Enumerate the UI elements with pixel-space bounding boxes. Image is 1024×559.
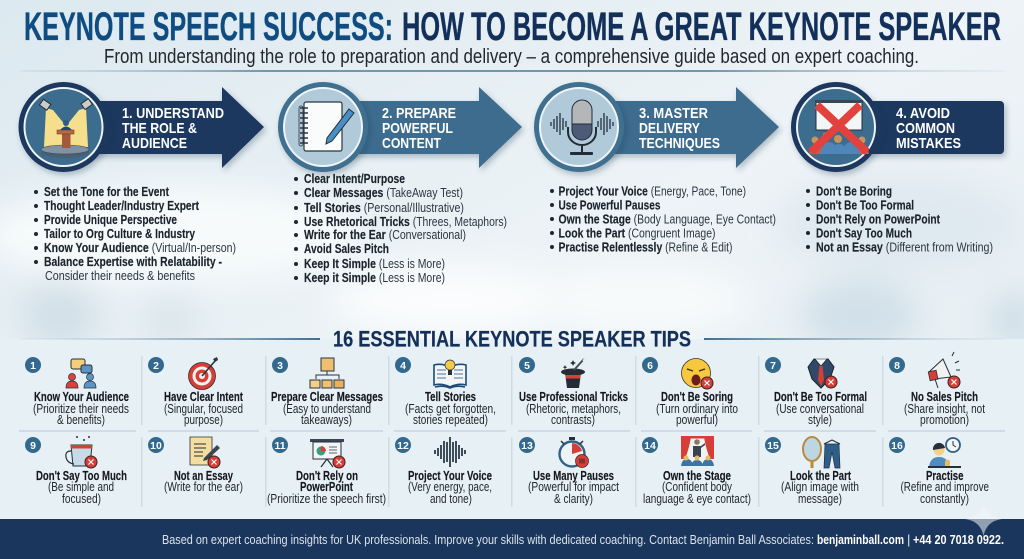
tip 11: 11 (274, 440, 286, 452)
list: understand the role (34, 184, 236, 283)
icon: overflowing cup (66, 437, 97, 468)
list: understand the role: Balance Expertise with Relatability - (44, 254, 222, 269)
icon: message boxes (310, 358, 344, 388)
list: common mistakes: Not an Essay (Different from Writing) (816, 240, 993, 254)
footer (0, 519, 1024, 559)
tip 11: (Prioritize the speech first) (267, 492, 386, 506)
step 2 circle (278, 82, 368, 172)
step 2 label (382, 105, 456, 152)
step 3 label: 3. MASTER (639, 105, 708, 122)
tip 10: 10 (150, 440, 162, 452)
icon: magic hat (561, 359, 585, 388)
tip 3: (Easy to understand (283, 402, 371, 416)
list: prepare content: Use Rhetorical Tricks (Threes, Metaphors) (304, 214, 507, 229)
list: prepare content: Write for the Ear (Conversational) (304, 227, 466, 242)
tip 3: 3 (277, 360, 283, 372)
step 1 circle (18, 82, 108, 172)
footer: +44 20 7018 0922. (913, 532, 1004, 547)
tip 10: (Write for the ear) (164, 480, 243, 494)
tip 3 (271, 357, 383, 427)
step 2 label: POWERFUL (382, 120, 453, 137)
tip 6 (642, 357, 738, 427)
tip 3: takeaways) (301, 413, 352, 427)
step 4: avoid common mistakes (791, 82, 1004, 172)
tip 6: 6 (647, 360, 653, 372)
tip 11: PowerPoint (300, 480, 354, 494)
footer: Based on expert coaching insights for UK professionals. Improve your skills with dedicated coaching. Contact Benjamin Ball Associates: (162, 532, 814, 547)
step 3 circle (534, 82, 624, 172)
tip 16: (Refine and improve (900, 480, 989, 494)
tips heading: 16 ESSENTIAL KEYNOTE SPEAKER TIPS (333, 326, 691, 352)
list: common mistakes: Don't Rely on PowerPoint (816, 212, 941, 226)
list: prepare content: Tell Stories (Personal/Illustrative) (304, 200, 464, 215)
tip 1: (Prioritize their needs (33, 402, 129, 416)
sparkle watermark (965, 502, 1002, 536)
list: prepare content: Avoid Sales Pitch (304, 241, 389, 256)
icon: voice waveform (435, 437, 465, 467)
list: prepare content (294, 171, 507, 285)
list: common mistakes: Don't Be Too Formal (816, 198, 914, 212)
tip 4: 4 (400, 360, 406, 372)
icon: scroll (190, 437, 220, 468)
step 3: master delivery techniques (534, 82, 779, 172)
icon: audience (66, 359, 96, 388)
tip 5: Use Professional Tricks (519, 390, 628, 404)
tip 16: 16 (891, 440, 903, 452)
tip 6: powerful) (676, 413, 718, 427)
tip 5: (Rhetoric, metaphors, (526, 402, 621, 416)
tip 9: 9 (30, 440, 36, 452)
step 1: understand the role and audience (18, 82, 264, 172)
step 4 circle (791, 82, 881, 172)
list: delivery techniques: Project Your Voice (Energy, Pace, Tone) (558, 184, 746, 198)
tip 2: 2 (153, 360, 159, 372)
step 1 label (122, 105, 224, 152)
icon: book with bulb (434, 360, 466, 388)
list: delivery techniques: Look the Part (Congruent Image) (558, 226, 716, 240)
step 1 label: 1. UNDERSTAND (122, 105, 224, 122)
tip 12 (395, 437, 492, 506)
list: delivery techniques: Own the Stage (Body Language, Eye Contact) (558, 212, 776, 226)
tip 4: stories repeated) (413, 413, 488, 427)
tip 5: 5 (524, 360, 530, 372)
list: understand the role: Set the Tone for the Event (44, 184, 170, 199)
icon: person practising with clock (928, 438, 961, 468)
tip 4: (Facts get forgotten, (405, 402, 496, 416)
tip 8: (Share insight, not (904, 402, 985, 416)
tip 8: No Sales Pitch (911, 390, 978, 404)
tip 13 (519, 437, 619, 506)
tip 6: (Turn ordinary into (656, 402, 738, 416)
icon: bored face (682, 358, 713, 389)
tip 9: Don't Say Too Much (36, 469, 127, 483)
tip 14: language & eye contact) (643, 492, 751, 506)
tip 7: style) (808, 413, 832, 427)
list: prepare content: Clear Intent/Purpose (304, 171, 405, 186)
tip 3: Prepare Clear Messages (271, 390, 383, 404)
list: understand the role: Know Your Audience (Virtual/In-person) (44, 240, 236, 255)
tip 2: purpose) (184, 413, 223, 427)
tip 4: Tell Stories (425, 390, 476, 404)
list: delivery techniques (550, 184, 776, 254)
icon: stage (681, 436, 714, 466)
list: common mistakes (806, 184, 993, 254)
footer: | (907, 532, 910, 547)
tip 10: Not an Essay (174, 469, 233, 483)
tip 4 (395, 357, 496, 427)
step 4 label (896, 105, 961, 152)
tip 1: 1 (30, 360, 36, 372)
tip 13: & clarity) (554, 492, 593, 506)
tip 5: contrasts) (551, 413, 595, 427)
list: common mistakes: Don't Say Too Much (816, 226, 912, 240)
tip 9 (25, 437, 127, 506)
tip 15: (Align image with (781, 480, 859, 494)
list: understand the role: Tailor to Org Culture & Industry (44, 226, 196, 241)
icon: presentation board (310, 439, 345, 468)
tip 12: and tone) (430, 492, 472, 506)
tip 1: Know Your Audience (34, 390, 129, 404)
step 1 label: THE ROLE & (122, 120, 197, 137)
tip 16: constantly) (920, 492, 969, 506)
tip 14: 14 (644, 440, 656, 452)
step 2 label: 2. PREPARE (382, 105, 456, 122)
tip 9: focused) (62, 492, 101, 506)
tip 7: (Use conversational (776, 402, 864, 416)
icon: megaphone (928, 352, 960, 388)
tip 1 (25, 357, 129, 427)
tip 7: 7 (770, 360, 776, 372)
icon: target (188, 357, 218, 390)
arrow 1 (60, 87, 264, 168)
tip 8: promotion) (920, 413, 969, 427)
tip 12: 12 (397, 440, 409, 452)
icon: notebook and pen (299, 102, 354, 151)
tip 7 (765, 357, 867, 427)
icon: microphone (551, 100, 613, 155)
tip 16: Practise (926, 469, 964, 483)
step 3 label (639, 105, 720, 152)
tip 2 (148, 357, 244, 427)
tip 8 (889, 352, 985, 427)
tip 13: 13 (521, 440, 533, 452)
tip 14: Own the Stage (663, 469, 731, 483)
list: delivery techniques: Use Powerful Pauses (558, 198, 660, 212)
tip 13: Use Many Pauses (533, 469, 614, 483)
bar 4 (840, 101, 1004, 154)
tip 13: (Powerful for impact (528, 480, 619, 494)
icon: suit (808, 359, 837, 388)
tip 11: Don't Rely on (296, 469, 358, 483)
tip 2: (Singular, focused (164, 402, 243, 416)
tip 9: (Be simple and (48, 480, 114, 494)
list: common mistakes: Don't Be Boring (816, 184, 892, 198)
icon: podium under spotlights (39, 99, 92, 158)
icon: stopwatch (560, 437, 588, 468)
icon: mirror and trousers (803, 437, 840, 468)
tip 10 (148, 437, 243, 494)
step 3 label: TECHNIQUES (639, 135, 720, 152)
icon: crossed-out presentation (809, 100, 869, 154)
tip 8: 8 (894, 360, 900, 372)
tip 16 (889, 437, 989, 506)
step 4 label: 4. AVOID (896, 105, 950, 122)
tip 15: 15 (767, 440, 779, 452)
list: prepare content: Keep it Simple (Less is More) (304, 270, 445, 285)
step 4 label: COMMON (896, 120, 955, 137)
step 4 label: MISTAKES (896, 135, 961, 152)
list: prepare content: Keep It Simple (Less is More) (304, 256, 445, 271)
tip 2: Have Clear Intent (164, 390, 244, 404)
tip 11 (267, 437, 386, 506)
arrow 3 (578, 87, 779, 168)
title: KEYNOTE SPEECH SUCCESS: (24, 5, 393, 49)
tip 14: (Confident body (662, 480, 733, 494)
tip 14 (642, 436, 751, 506)
step 1 label: AUDIENCE (122, 135, 187, 152)
tip 6: Don't Be Soring (661, 390, 733, 404)
tip 5 (519, 357, 628, 427)
tip 1: & benefits) (57, 413, 105, 427)
tip 12: Project Your Voice (408, 469, 492, 483)
tip 15: Look the Part (790, 469, 852, 483)
title (24, 5, 1001, 49)
list: understand the role: Provide Unique Perspective (44, 212, 177, 227)
list: prepare content: Clear Messages (TakeAway Test) (304, 185, 463, 200)
tip 12: (Very energy, pace, (408, 480, 492, 494)
tip 7: Don't Be Too Formal (774, 390, 867, 404)
list: delivery techniques: Practise Relentlessly (Refine & Edit) (558, 240, 732, 254)
arrow 2 (320, 87, 522, 168)
step 2: prepare powerful content (278, 82, 522, 172)
footer: benjaminball.com (817, 532, 904, 547)
list: understand the role: Thought Leader/Industry Expert (44, 198, 200, 213)
tip 15 (765, 437, 859, 506)
step 3 label: DELIVERY (639, 120, 700, 137)
tip 15: message) (798, 492, 842, 506)
list: understand the role: Consider their needs & benefits (45, 268, 195, 283)
step 2 label: CONTENT (382, 135, 441, 152)
